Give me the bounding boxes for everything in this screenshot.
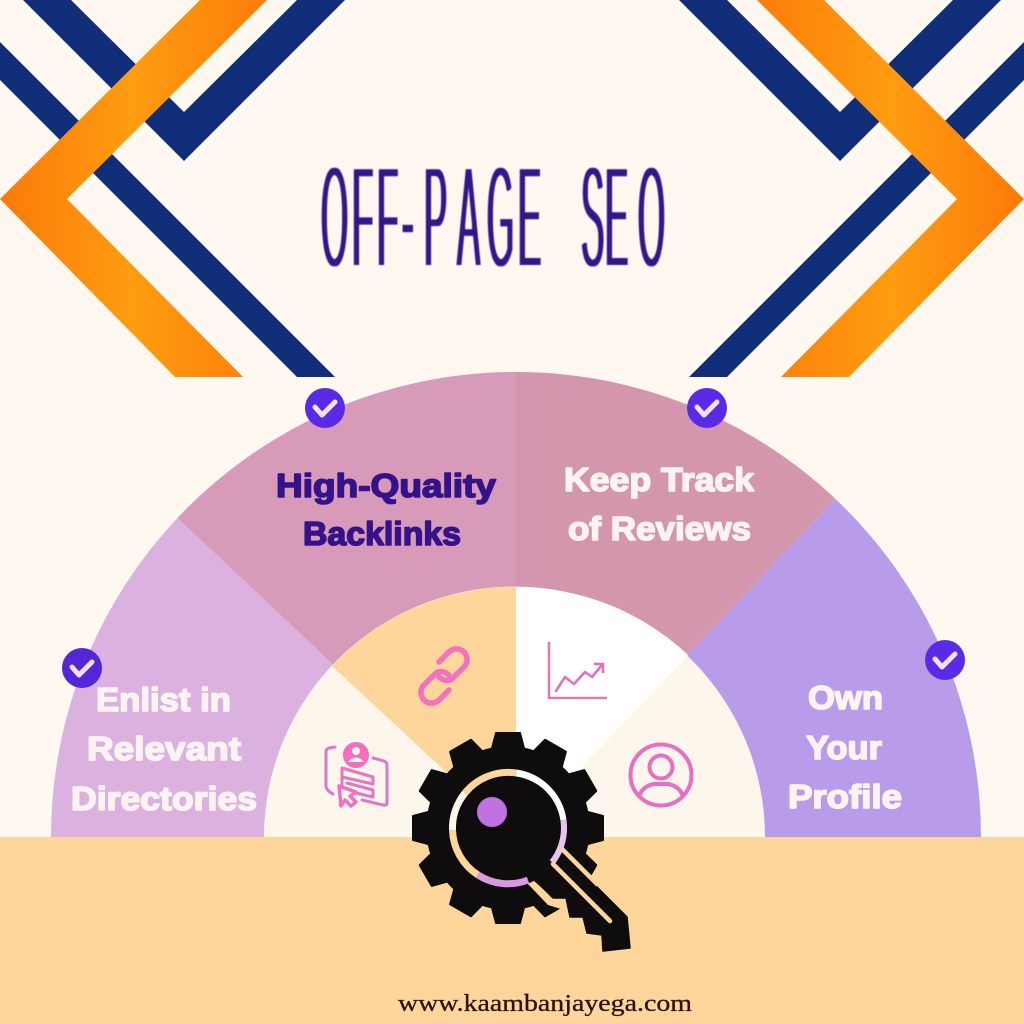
title: OFF-PAGE SEO bbox=[321, 138, 665, 299]
label: Own Your Profile: Your bbox=[806, 729, 882, 766]
label: High-Quality Backlinks: Backlinks bbox=[303, 515, 461, 552]
label: Keep Track of Reviews: Keep Track bbox=[564, 461, 755, 498]
label: Enlist in Relevant Directories bbox=[71, 681, 257, 817]
inner hub: cream base bbox=[264, 587, 765, 837]
label: Own Your Profile bbox=[788, 679, 902, 815]
inner hub: peach wedge bbox=[332, 587, 516, 837]
label: High-Quality Backlinks bbox=[276, 467, 497, 552]
segment: reviews bbox=[516, 372, 836, 837]
label: Keep Track of Reviews bbox=[564, 461, 755, 547]
icon: user profile bbox=[630, 744, 692, 806]
decoration: right chevrons bbox=[679, 0, 1024, 377]
badge: check profile bbox=[925, 640, 965, 680]
segment: directories bbox=[51, 518, 516, 837]
segment: profile bbox=[516, 499, 981, 837]
key cuts bbox=[553, 849, 610, 921]
badge: check backlinks bbox=[305, 388, 345, 428]
panel: gauge segments bbox=[51, 372, 981, 837]
badge: check reviews bbox=[687, 388, 727, 428]
icon: chain link bbox=[421, 649, 467, 703]
key head bbox=[457, 776, 561, 880]
gear body bbox=[413, 733, 603, 923]
label: Enlist in Relevant Directories: Relevant bbox=[87, 730, 241, 767]
key hole bbox=[477, 797, 507, 827]
badge: check directories bbox=[62, 648, 102, 688]
key blade bbox=[535, 853, 630, 951]
label: Enlist in Relevant Directories: Enlist in bbox=[96, 681, 231, 718]
label: High-Quality Backlinks: High-Quality bbox=[276, 467, 497, 504]
icon: growth chart bbox=[549, 642, 607, 698]
label: Keep Track of Reviews: of Reviews bbox=[568, 510, 751, 547]
footer url: www.kaambanjayega.com bbox=[398, 991, 692, 1017]
bottom band bbox=[0, 837, 1024, 1024]
decoration: left chevrons bbox=[0, 0, 345, 377]
label: Own Your Profile: Own bbox=[808, 679, 883, 716]
icon: directory listing with cursor bbox=[326, 744, 387, 806]
gap between gear and key bbox=[527, 880, 570, 915]
label: Enlist in Relevant Directories: Directories bbox=[71, 780, 257, 817]
key ring bbox=[452, 772, 564, 884]
icon: gear with key bbox=[413, 733, 630, 951]
segment: backlinks bbox=[178, 372, 516, 837]
inner hub: white wedge bbox=[516, 587, 688, 837]
label: Own Your Profile: Profile bbox=[788, 778, 902, 815]
